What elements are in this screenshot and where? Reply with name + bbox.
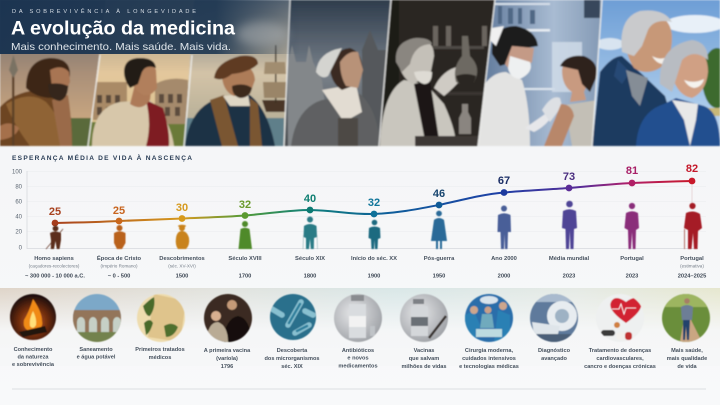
milestone captions: e tecnologias médicas — [459, 364, 519, 370]
era labels: 1700 — [239, 274, 251, 280]
era labels: 1900 — [368, 274, 380, 280]
milestone captions: cardiovasculares, — [596, 356, 644, 362]
icon: navigator silhouette — [176, 225, 189, 249]
era labels: Descobrimentos — [159, 256, 205, 262]
era labels — [25, 254, 706, 280]
icon: first vaccine — [204, 294, 252, 342]
milestone captions: cuidados intensivos — [462, 356, 516, 362]
era labels: Época de Cristo — [97, 254, 142, 262]
milestone captions: da natureza — [17, 354, 49, 360]
icon: 19th century silhouette — [303, 216, 318, 249]
icon: roman silhouette — [114, 225, 126, 249]
data values: 81 — [626, 165, 638, 177]
icon: modern surgery — [465, 294, 513, 342]
era labels: 2023 — [626, 274, 638, 280]
icon: post-war silhouette — [431, 211, 447, 249]
milestone captions: mais qualidade — [667, 356, 707, 362]
era labels: (estimativa) — [680, 264, 704, 268]
data values: 25 — [113, 205, 125, 217]
icon: year 2000 silhouette — [498, 206, 511, 249]
icon: campfire — [9, 293, 57, 341]
title backdrop — [0, 0, 300, 54]
milestone captions: Primeiros tratados — [135, 347, 185, 353]
milestone captions: Conhecimento — [14, 347, 53, 353]
milestone captions: e novos — [347, 356, 369, 362]
y axis: 100 — [12, 170, 23, 176]
panel: 19th century scientist — [379, 0, 499, 146]
milestone captions: Tratamento de doenças — [589, 348, 651, 354]
y axis: 40 — [15, 214, 23, 220]
icon: Portugal 2023 silhouette — [624, 203, 639, 249]
y axis: 0 — [19, 246, 23, 252]
milestone captions: Antibióticos — [342, 348, 374, 354]
era labels: ~ 0 - 500 — [108, 274, 130, 280]
milestone captions: milhões de vidas — [401, 364, 447, 370]
y axis: 80 — [15, 184, 23, 190]
era labels: 2023 — [563, 274, 575, 280]
era labels: 1950 — [433, 274, 445, 280]
icon: vaccines — [400, 294, 448, 342]
era labels: Portugal — [680, 256, 704, 262]
title block — [11, 7, 235, 53]
icon: 18th century silhouette — [238, 221, 252, 249]
life expectancy line — [55, 181, 692, 223]
icon: heart and pills — [600, 294, 642, 341]
data values: 32 — [239, 199, 251, 211]
milestone captions: avançado — [541, 356, 567, 362]
milestone captions: (varíola) — [216, 356, 238, 362]
milestone captions: Cirurgia moderna, — [465, 348, 514, 354]
era labels: (séc. XV-XVI) — [168, 264, 196, 268]
era labels: 2000 — [498, 274, 510, 280]
icon: diagnostic scanner — [530, 294, 578, 342]
data values: 82 — [686, 163, 698, 175]
data values: 67 — [498, 175, 510, 187]
milestone captions: médicos — [149, 355, 171, 361]
data values: 73 — [563, 171, 575, 183]
icon: early 1900s silhouette — [368, 220, 380, 249]
era labels: Pós-guerra — [424, 256, 455, 262]
icon: Portugal estimate silhouette — [684, 203, 702, 249]
era labels: (Império Romano) — [100, 264, 138, 268]
milestone captions: Saneamento — [79, 347, 113, 353]
era labels: Século XVIII — [228, 256, 262, 262]
data points — [52, 178, 695, 226]
milestone captions: e sobrevivência — [12, 362, 55, 368]
milestone captions: cancro e doenças crónicas — [584, 364, 656, 370]
icon: hunter silhouette — [46, 226, 63, 249]
icon: medical treatise — [137, 294, 186, 342]
era labels: Portugal — [620, 256, 644, 262]
milestone captions: dos microrganismos — [264, 356, 320, 362]
data values: 25 — [49, 206, 61, 218]
panel: healthy older couple — [592, 0, 720, 146]
panel: age of discoveries navigator — [184, 0, 294, 146]
icon: aqueduct — [73, 294, 121, 342]
panel: 18th century nurse — [284, 0, 394, 146]
chart: life expectancy at birth — [12, 153, 706, 280]
milestone captions: 1796 — [221, 364, 233, 370]
era labels: Média mundial — [549, 256, 590, 262]
era labels: ~ 300 000 - 10 000 a.C. — [25, 274, 85, 280]
milestone captions: e água potável — [77, 354, 116, 360]
milestone captions: que salvam — [409, 356, 439, 362]
milestone captions — [12, 347, 707, 370]
milestone captions: Vacinas — [414, 348, 434, 354]
chart heading: ESPERANÇA MÉDIA DE VIDA À NASCENÇA — [12, 153, 192, 162]
milestone captions: A primeira vacina — [204, 348, 251, 354]
y axis: 20 — [15, 230, 23, 236]
icon: microorganisms — [270, 294, 316, 340]
panel dividers — [88, 0, 602, 146]
milestone captions: medicamentos — [338, 364, 378, 370]
milestone captions: Diagnóstico — [538, 348, 571, 354]
era labels: (caçadores-recolectores) — [29, 264, 80, 268]
milestone captions: séc. XIX — [281, 364, 303, 370]
clouds behind the title — [236, 22, 288, 46]
data values: 30 — [176, 202, 188, 214]
subtitle: Mais conhecimento. Mais saúde. Mais vida. — [11, 42, 231, 53]
era labels: Homo sapiens — [34, 256, 74, 262]
population silhouettes — [46, 201, 702, 249]
icon: world average silhouette — [562, 201, 577, 249]
milestone captions: Descoberta — [277, 348, 308, 354]
data values: 32 — [368, 197, 380, 209]
panel: vaccination — [478, 0, 604, 146]
eyebrow: DA SOBREVIVÊNCIA À LONGEVIDADE — [12, 7, 196, 15]
era labels: 2024–2025 — [678, 274, 706, 280]
data values: 40 — [304, 193, 316, 205]
hero image band: eras of medicine — [0, 0, 720, 146]
milestone captions: Mais saúde, — [671, 348, 703, 354]
y axis: 60 — [15, 200, 23, 206]
era labels: Início do séc. XX — [351, 256, 397, 262]
data values — [49, 163, 698, 218]
data values: 46 — [433, 188, 445, 200]
y axis — [12, 170, 706, 252]
era labels: 1500 — [176, 274, 188, 280]
era labels: Século XIX — [295, 256, 325, 262]
icon: antibiotics — [334, 294, 382, 342]
icon: walking outdoors — [662, 294, 710, 342]
heading: A evolução da medicina — [11, 18, 235, 40]
panel: milestones strip — [0, 288, 720, 389]
milestone captions: de vida — [677, 364, 698, 370]
panel: roman era — [88, 0, 198, 146]
era labels: Ano 2000 — [491, 256, 517, 262]
era labels: 1800 — [304, 274, 316, 280]
panel: hunter-gatherer — [0, 0, 110, 146]
